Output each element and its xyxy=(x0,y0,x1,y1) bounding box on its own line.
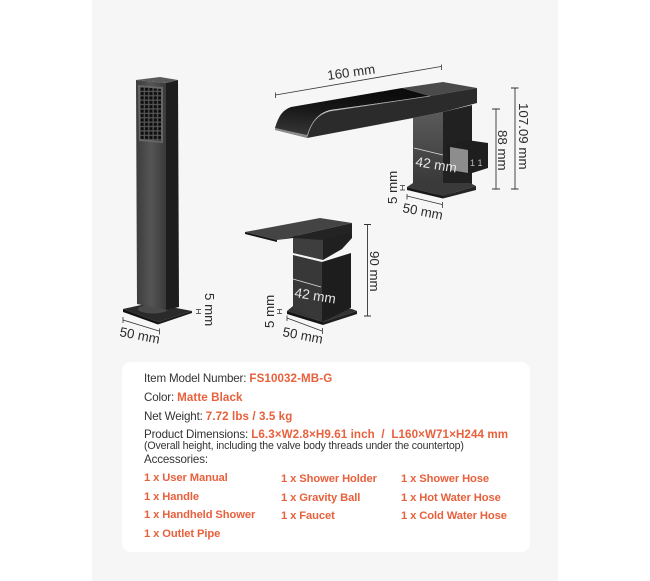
dimension: 107.09 mm xyxy=(511,88,531,189)
faucet side handle: 1 1 xyxy=(470,158,483,168)
accessories column 3 xyxy=(401,473,507,522)
panel: specifications card xyxy=(122,362,530,552)
label: 42 mm: 42 mm xyxy=(415,154,458,175)
dimension: 160 mm: 160 mm xyxy=(326,61,376,83)
valve base xyxy=(287,306,357,325)
accessories column 1: 1 x Outlet Pipe xyxy=(144,528,220,540)
dimension: 90 mm: 90 mm xyxy=(367,251,382,292)
net weight: Net Weight: 7.72 lbs / 3.5 kg xyxy=(144,410,292,423)
accessories column 2 xyxy=(281,473,377,522)
shower handle xyxy=(136,77,179,310)
model number: Item Model Number: FS10032-MB-G xyxy=(144,372,332,385)
single handle valve xyxy=(245,218,357,325)
faucet base xyxy=(407,183,476,198)
faucet body xyxy=(413,105,472,197)
product dimensions: Product Dimensions: L6.3×W2.8×H9.61 inch / L160×W71×H244 mm xyxy=(144,428,508,441)
dimension: shower base xyxy=(118,293,217,347)
dimension: 5 mm: 5 mm xyxy=(262,295,277,328)
dimension: 88 mm: 88 mm xyxy=(495,130,510,171)
shower base xyxy=(123,303,192,324)
accessories column 3: 1 x Hot Water Hose xyxy=(401,492,501,504)
dimension: 50 mm: 50 mm xyxy=(401,200,444,223)
accessories column 3: 1 x Shower Hose xyxy=(401,473,489,485)
dimension: 160 mm xyxy=(276,61,442,98)
dimensions: waterfall faucet xyxy=(276,61,531,223)
accessories column 1 xyxy=(144,472,256,540)
dimension: shower base: 5 mm xyxy=(202,293,217,326)
dimension: 5 mm: 5 mm xyxy=(385,171,400,204)
valve lower block xyxy=(293,253,351,322)
accessories heading: Accessories: xyxy=(144,453,208,466)
accessories column 2: 1 x Gravity Ball xyxy=(281,492,360,504)
dimensions: valve xyxy=(262,224,382,347)
accessories column 1: 1 x User Manual xyxy=(144,472,228,484)
dimension: 50 mm: 50 mm xyxy=(281,324,324,347)
dimension: shower base: 50 mm xyxy=(118,324,161,347)
handheld shower xyxy=(123,77,192,324)
dimension: 107.09 mm: 107.09 mm xyxy=(516,103,531,170)
accessories column 2: 1 x Shower Holder xyxy=(281,473,377,485)
background panel xyxy=(92,0,558,581)
faucet side handle xyxy=(447,140,488,174)
color: Color: Matte Black xyxy=(144,391,243,404)
label: 42 mm: 42 mm xyxy=(294,285,337,306)
valve lever xyxy=(245,218,352,260)
accessories column 3: 1 x Cold Water Hose xyxy=(401,510,507,522)
shower spray head xyxy=(138,85,163,143)
dimension: 88 mm xyxy=(492,109,510,189)
faucet spout xyxy=(275,82,477,138)
dimensions note: (Overall height, including the valve body threads under the countertop) xyxy=(144,440,464,452)
waterfall faucet xyxy=(275,82,488,198)
accessories column 1: 1 x Handheld Shower xyxy=(144,509,255,521)
accessories column 2: 1 x Faucet xyxy=(281,510,335,522)
accessories column 1: 1 x Handle xyxy=(144,491,199,503)
